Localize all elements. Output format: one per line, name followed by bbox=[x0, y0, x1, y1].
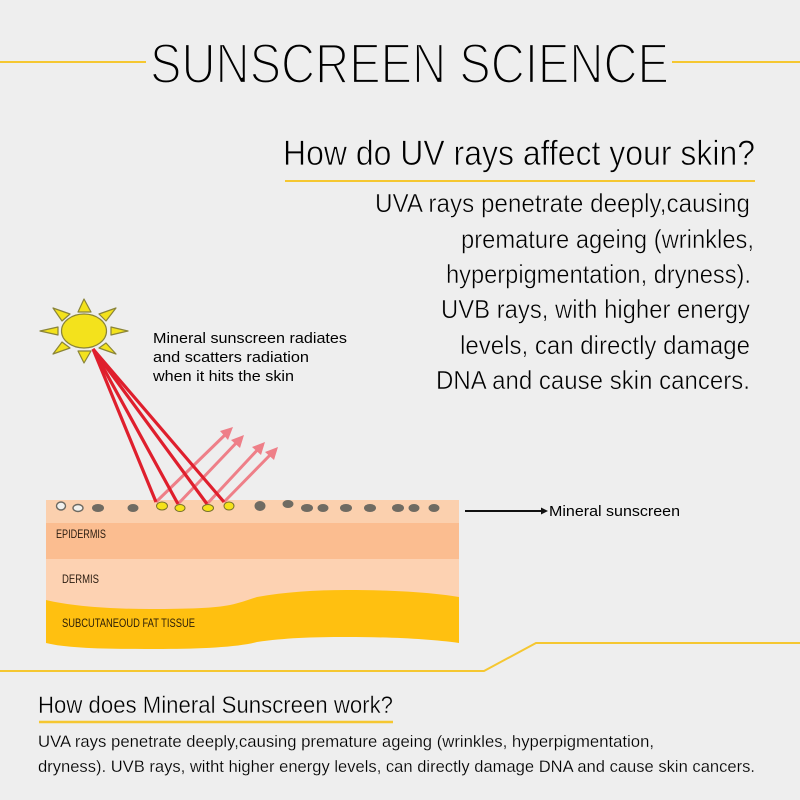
text block: UV rays explanation: DNA and cause skin cancers. bbox=[436, 365, 750, 395]
text block: UV rays explanation: levels, can directly damage bbox=[460, 330, 750, 360]
callout: mineral sunscreen radiates: Mineral sunscreen radiates bbox=[153, 331, 347, 347]
label: epidermis: EPIDERMIS bbox=[56, 529, 106, 541]
label: dermis: DERMIS bbox=[62, 574, 99, 586]
text block: mineral sunscreen explanation: UVA rays penetrate deeply,causing premature ageing (wrinkles, hyperpigmentation, bbox=[38, 732, 654, 751]
text block: mineral sunscreen explanation bbox=[38, 732, 755, 776]
layer: surface bbox=[46, 500, 459, 524]
callout: mineral sunscreen radiates bbox=[152, 331, 347, 385]
heading: how does mineral sunscreen work: How does Mineral Sunscreen work? bbox=[38, 692, 393, 719]
heading: how do UV rays affect your skin: How do UV rays affect your skin? bbox=[283, 134, 755, 173]
callout: mineral sunscreen radiates: when it hits the skin bbox=[152, 369, 294, 385]
arrow: to mineral sunscreen label bbox=[465, 508, 548, 514]
text block: UV rays explanation bbox=[375, 188, 754, 395]
callout: mineral sunscreen radiates: and scatters radiation bbox=[153, 350, 309, 366]
icon: sun bbox=[40, 299, 128, 363]
label: subcutaneous fat tissue: SUBCUTANEOUD FAT TISSUE bbox=[62, 618, 195, 630]
text block: UV rays explanation: UVB rays, with higher energy bbox=[441, 294, 750, 324]
layer: epidermis bbox=[46, 523, 459, 559]
title: SUNSCREEN SCIENCE bbox=[150, 32, 669, 96]
layer: dermis bbox=[46, 559, 459, 609]
skin layers diagram bbox=[46, 500, 459, 649]
layer: subcutaneous fat bbox=[46, 590, 459, 649]
divider line bbox=[0, 643, 800, 671]
text block: UV rays explanation: premature ageing (wrinkles, bbox=[461, 224, 754, 254]
label: mineral sunscreen: Mineral sunscreen bbox=[549, 504, 680, 520]
text block: UV rays explanation: UVA rays penetrate deeply,causing bbox=[375, 188, 750, 218]
text block: UV rays explanation: hyperpigmentation, dryness). bbox=[446, 259, 751, 289]
incoming red rays bbox=[93, 349, 224, 504]
text block: mineral sunscreen explanation: dryness). UVB rays, witht higher energy levels, can directly damage DNA and cause skin cancers. bbox=[38, 757, 755, 776]
mineral sunscreen particles bbox=[56, 500, 440, 512]
reflected pink arrows bbox=[156, 427, 278, 504]
